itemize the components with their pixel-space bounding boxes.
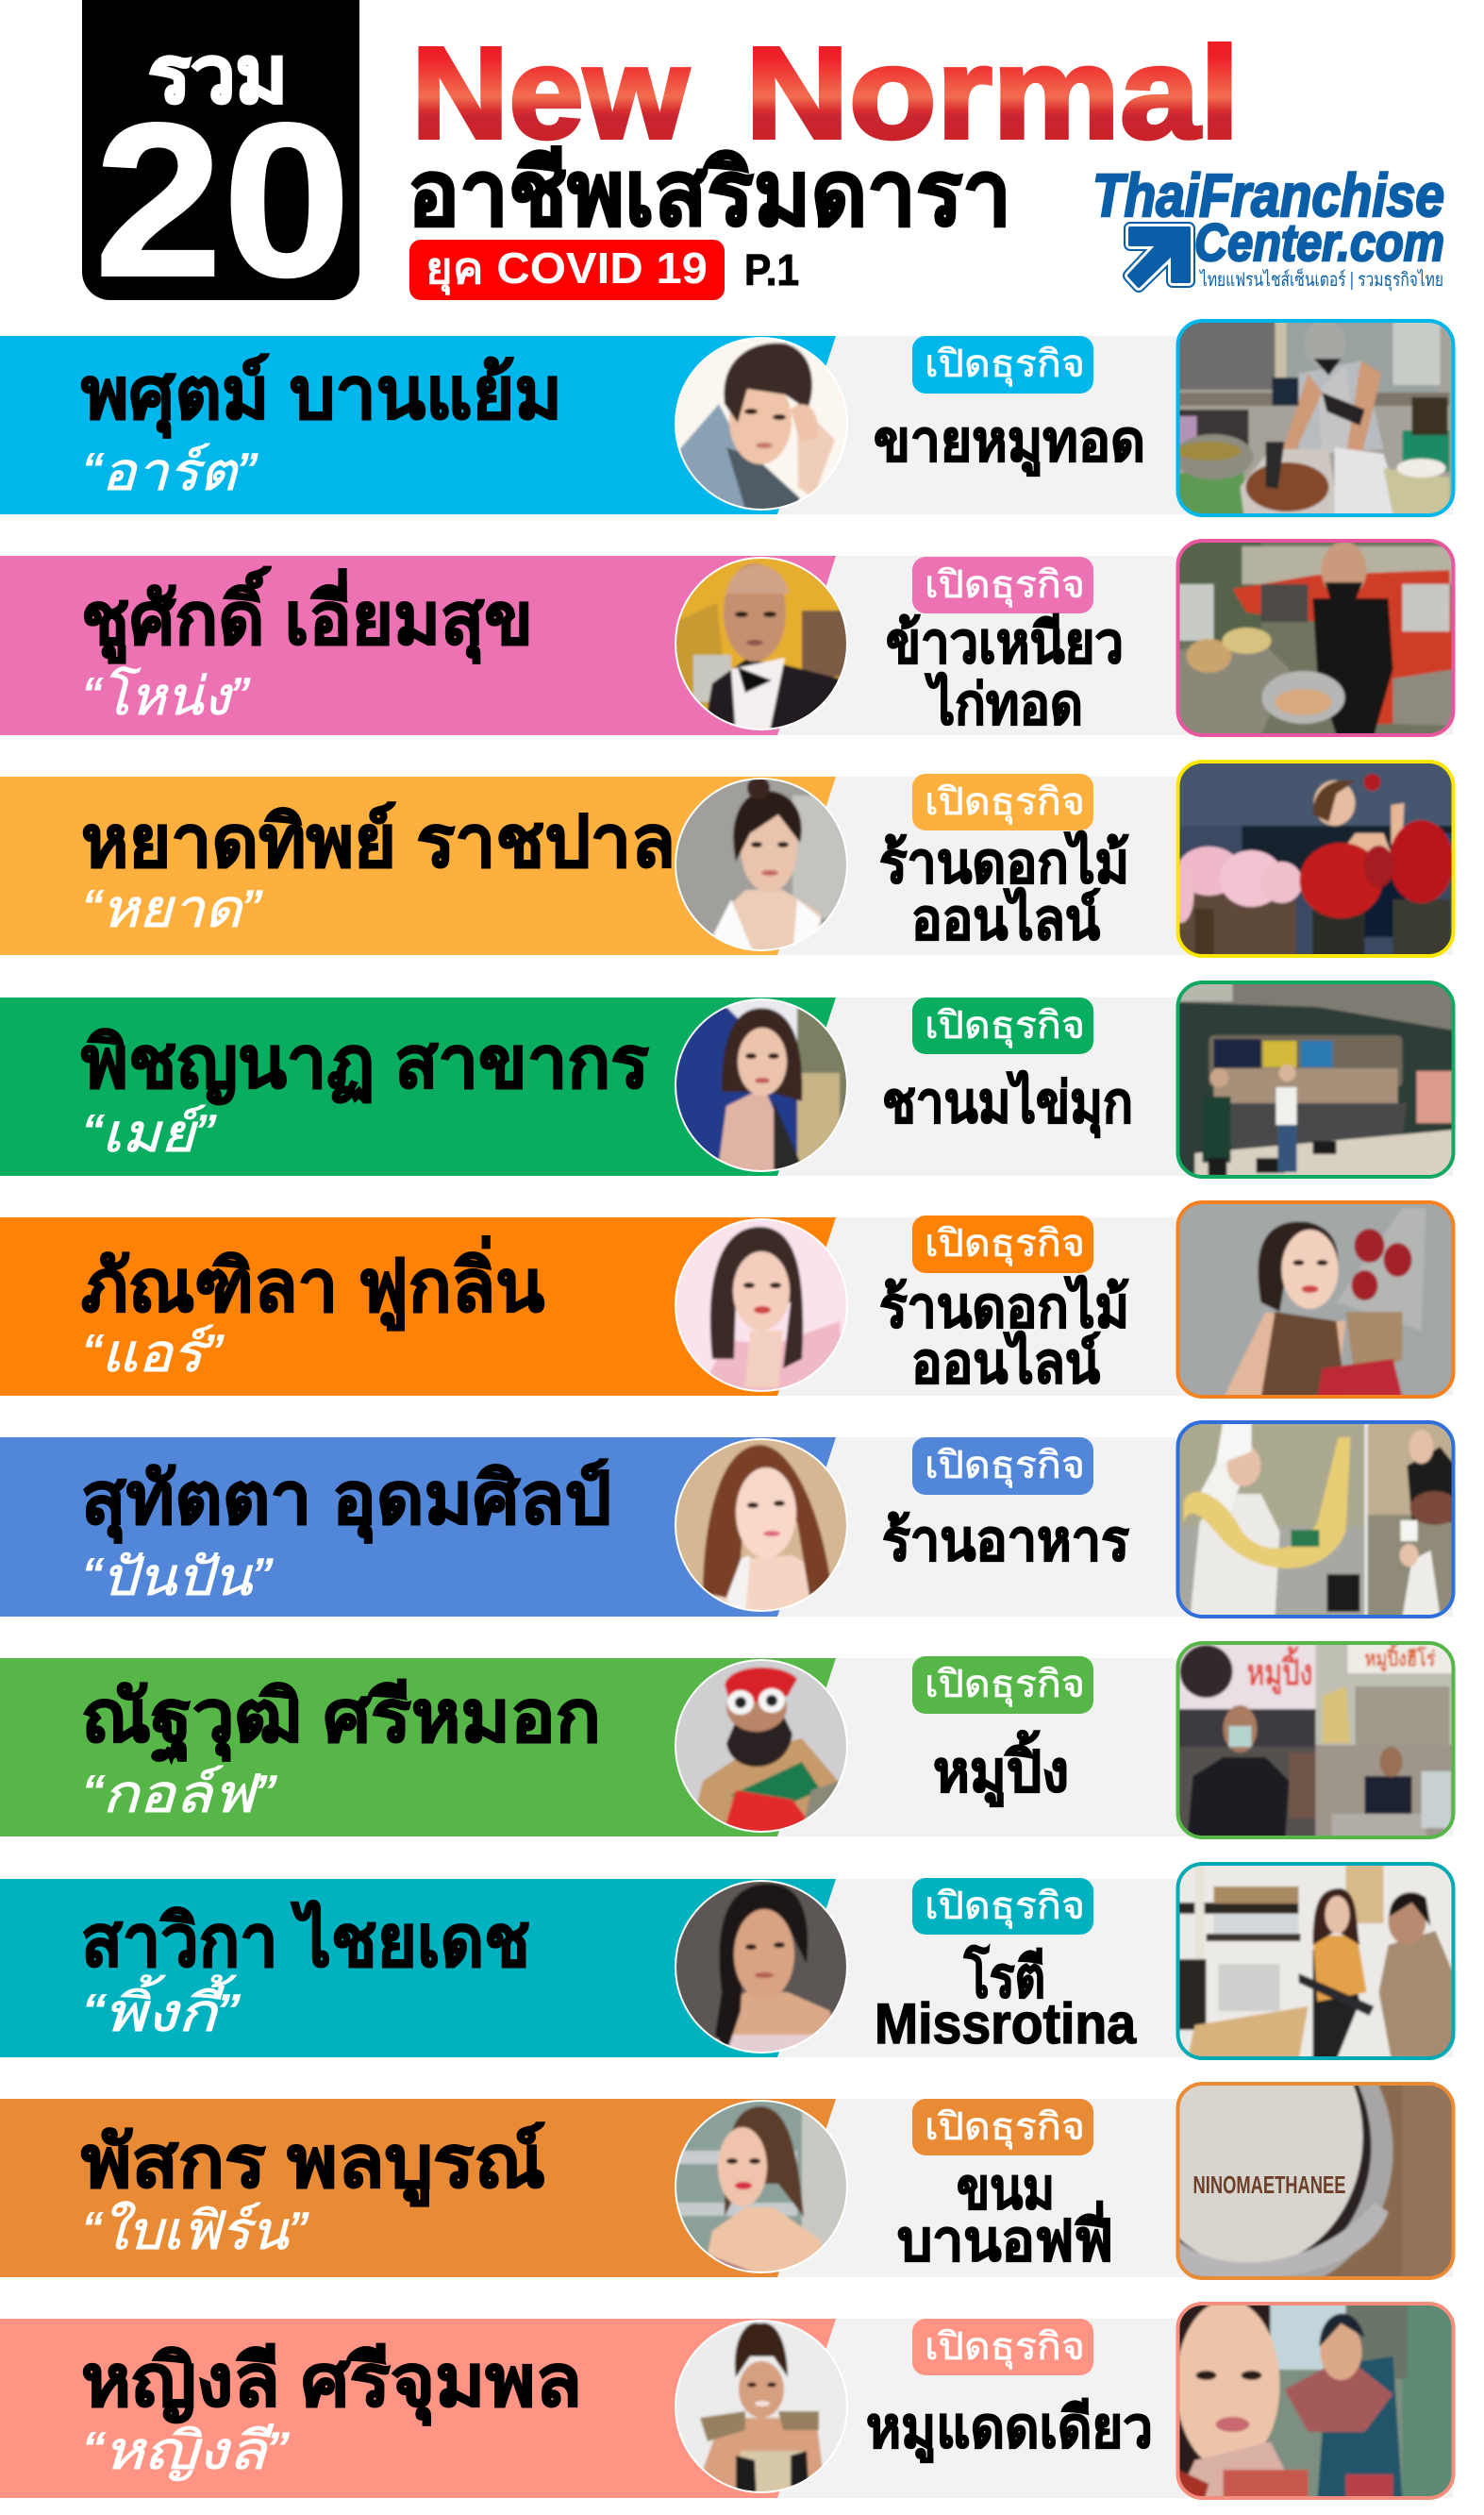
nickname: “ปันปัน” (82, 1547, 274, 1606)
business: ร้านอาหาร (882, 1509, 1129, 1572)
avatar (675, 777, 849, 956)
name: ภัณฑิลา ฟูกลิ่น (81, 1235, 544, 1331)
name band (0, 998, 836, 1176)
name band (0, 777, 836, 955)
name band (0, 1658, 836, 1836)
badge (912, 336, 1093, 394)
name band (0, 2099, 836, 2277)
name: สาวิกา ไชยเดช (81, 1900, 530, 1982)
era badge (409, 240, 725, 300)
badge (912, 1437, 1093, 1495)
row 8: สาวิกา ไชยเดช: Missrotina (875, 1992, 1137, 2055)
photo (1174, 319, 1455, 519)
name band (0, 2319, 836, 2498)
avatar (675, 1217, 848, 1397)
big number 20: 20 (94, 78, 351, 323)
photo (1176, 2300, 1455, 2502)
nickname: “หญิงลี” (82, 2421, 290, 2481)
badge: เปิดธุรกิจ (925, 1005, 1085, 1048)
badge (912, 1216, 1093, 1273)
name band (0, 1217, 836, 1396)
row 8: สาวิกา ไชยเดช (0, 1862, 1455, 2062)
business: ขนม (957, 2157, 1055, 2221)
photo (1176, 1420, 1459, 1620)
badge: เปิดธุรกิจ (925, 1223, 1085, 1266)
business: ร้านดอกไม้ (879, 1274, 1129, 1339)
logo: ThaiFranchise Center.com (1092, 161, 1444, 292)
business: ร้านดอกไม้ (879, 830, 1129, 895)
business: โรตี (963, 1944, 1045, 2009)
avatar (675, 2319, 848, 2498)
business: ขายหมูทอด (874, 410, 1145, 477)
name: สุทัตตา อุดมศิลป์ (81, 1459, 611, 1544)
name: พัสกร พลบูรณ์ (81, 2122, 545, 2206)
row 4: พิชญนาฏ สาขากร (0, 981, 1455, 1181)
row 5: ภัณฑิลา ฟูกลิ่น: ออนไลน์ (911, 1330, 1101, 1395)
business: ชานมไข่มุก (882, 1069, 1133, 1138)
nickname: “แอร์” (82, 1323, 225, 1383)
title: New Normal (411, 21, 1240, 166)
avatar (675, 998, 849, 1177)
nickname: “หยาด” (82, 879, 263, 938)
avatar (675, 336, 848, 515)
avatar (675, 1437, 848, 1617)
name: พิชญนาฏ สาขากร (81, 1023, 649, 1105)
name band (0, 336, 836, 514)
badge (912, 557, 1093, 613)
photo (1176, 1862, 1455, 2062)
name: ชูศักดิ์ เอี่ยมสุข (81, 566, 533, 664)
photo (1176, 981, 1455, 1181)
name: ณัฐวุฒิ ศรีหมอก (81, 1677, 601, 1763)
photo: หมูปิ้ง (1247, 1646, 1313, 1695)
photo (1176, 1641, 1455, 1841)
name band (0, 1879, 836, 2057)
subtitle: อาชีพเสริมดารา: อาชีพเสริมดารา (408, 143, 1011, 244)
row 9: พัสกร พลบูรณ์ (0, 2082, 1455, 2280)
business: หมูแดดเดียว (866, 2396, 1153, 2463)
badge: เปิดธุรกิจ (925, 1886, 1085, 1929)
nickname: “เมย์” (82, 1103, 217, 1163)
badge: เปิดธุรกิจ (925, 781, 1085, 825)
business: หมูปิ้ง (933, 1730, 1069, 1807)
cake lettering: NINOMAETHANEE (1192, 2171, 1345, 2199)
badge: เปิดธุรกิจ (925, 564, 1085, 608)
badge (912, 998, 1093, 1054)
logo: ThaiFranchise Center.com: Center.com (1194, 212, 1444, 272)
box label รวม: รวม (148, 30, 288, 119)
page marker: P.1 (744, 245, 799, 294)
badge (912, 774, 1093, 830)
badge: เปิดธุรกิจ (925, 2326, 1085, 2370)
name: พศุตม์ บานแย้ม (81, 354, 562, 439)
era badge: ยุค COVID 19 (425, 243, 708, 295)
row 2: ชูศักดิ์ เอี่ยมสุข: ไก่ทอด (925, 671, 1083, 736)
row 9: พัสกร พลบูรณ์: บานอฟฟี่ (897, 2201, 1113, 2272)
business: ข้าวเหนียว (886, 612, 1124, 675)
badge (912, 2099, 1093, 2155)
photo (1176, 1200, 1455, 1400)
photo: หมูปิ้งฮีโร่ (1364, 1643, 1436, 1672)
row 2: ชูศักดิ์ เอี่ยมสุข (0, 539, 1455, 739)
row 6: สุทัตตา อุดมศิลป์ (0, 1420, 1459, 1620)
row 10: หญิงลี ศรีจุมพล (0, 2300, 1455, 2502)
title: New Normal: New (411, 21, 690, 166)
avatar (675, 2099, 849, 2278)
badge (912, 1878, 1093, 1935)
icon: logo arrow (1129, 228, 1189, 286)
title: New Normal: Normal (745, 21, 1240, 166)
avatar (675, 556, 849, 735)
badge (912, 1656, 1093, 1714)
name band (0, 556, 836, 735)
nickname: “โหน่ง” (82, 666, 250, 726)
row 3: หยาดทิพย์ ราชปาล (0, 760, 1455, 961)
badge: เปิดธุรกิจ (925, 1664, 1085, 1707)
nickname: “อาร์ต” (82, 442, 258, 501)
name: หญิงลี ศรีจุมพล (81, 2341, 582, 2426)
badge (912, 2319, 1093, 2375)
badge: เปิดธุรกิจ (925, 2106, 1085, 2150)
avatar (675, 1658, 848, 1837)
name band (0, 1437, 836, 1617)
avatar (675, 1879, 848, 2058)
row 3: หยาดทิพย์ ราชปาล: ออนไลน์ (911, 886, 1101, 951)
photo (1176, 539, 1455, 739)
badge: เปิดธุรกิจ (925, 344, 1085, 387)
nickname: “ใบเฟิร์น” (82, 2201, 308, 2260)
name: หยาดทิพย์ ราชปาล (81, 802, 675, 882)
header: black count box (82, 0, 359, 323)
row 5: ภัณฑิลา ฟูกลิ่น (0, 1200, 1455, 1400)
photo (1176, 2082, 1455, 2280)
photo (1168, 760, 1455, 961)
row 1: พศุตม์ บานแย้ม (0, 319, 1455, 519)
row 7: ณัฐวุฒิ ศรีหมอก (0, 1641, 1455, 1841)
badge: เปิดธุรกิจ (925, 1445, 1085, 1488)
nickname: “พิ้งกี้” (82, 1974, 241, 2042)
nickname: “กอล์ฟ” (82, 1764, 277, 1823)
